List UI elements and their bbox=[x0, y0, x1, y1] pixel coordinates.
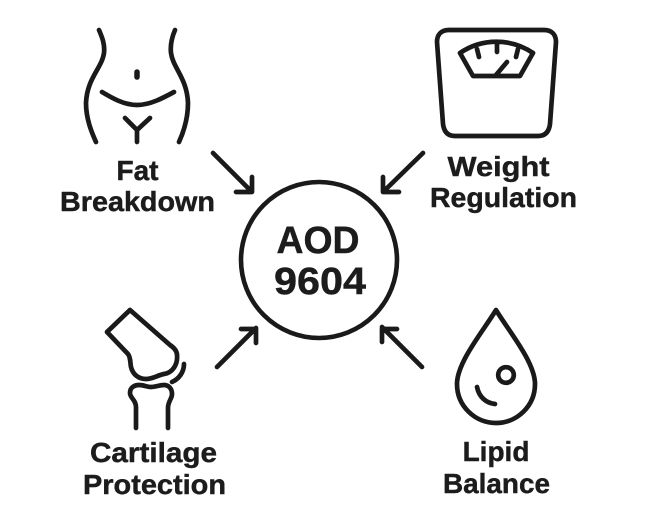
arrow: top left bbox=[213, 153, 252, 192]
label: Cartilage Protection: Cartilage bbox=[90, 437, 217, 468]
arrow: bottom right bbox=[382, 327, 422, 367]
label: Fat Breakdown bbox=[60, 155, 215, 217]
center circle: AOD 9604: AOD bbox=[276, 220, 360, 262]
label: Lipid Balance: Balance bbox=[443, 468, 550, 499]
icon: weighing scale bbox=[437, 30, 556, 136]
label: Fat Breakdown: Breakdown bbox=[60, 186, 215, 217]
label: Lipid Balance bbox=[443, 436, 550, 499]
icon: lipid drop bbox=[457, 310, 535, 423]
label: Cartilage Protection: Protection bbox=[83, 469, 226, 500]
icon: torso bbox=[86, 30, 188, 142]
label: Fat Breakdown: Fat bbox=[116, 155, 158, 186]
label: Cartilage Protection bbox=[83, 437, 226, 500]
center circle: AOD 9604: 9604 bbox=[274, 261, 366, 303]
arrow: top right bbox=[383, 153, 423, 192]
center circle: AOD 9604 bbox=[241, 182, 397, 338]
arrow: bottom left bbox=[217, 328, 256, 367]
label: Weight Regulation bbox=[430, 151, 577, 213]
label: Weight Regulation: Weight bbox=[448, 151, 550, 182]
label: Weight Regulation: Regulation bbox=[430, 182, 577, 213]
icon: knee joint bbox=[107, 310, 184, 428]
label: Lipid Balance: Lipid bbox=[463, 436, 529, 467]
